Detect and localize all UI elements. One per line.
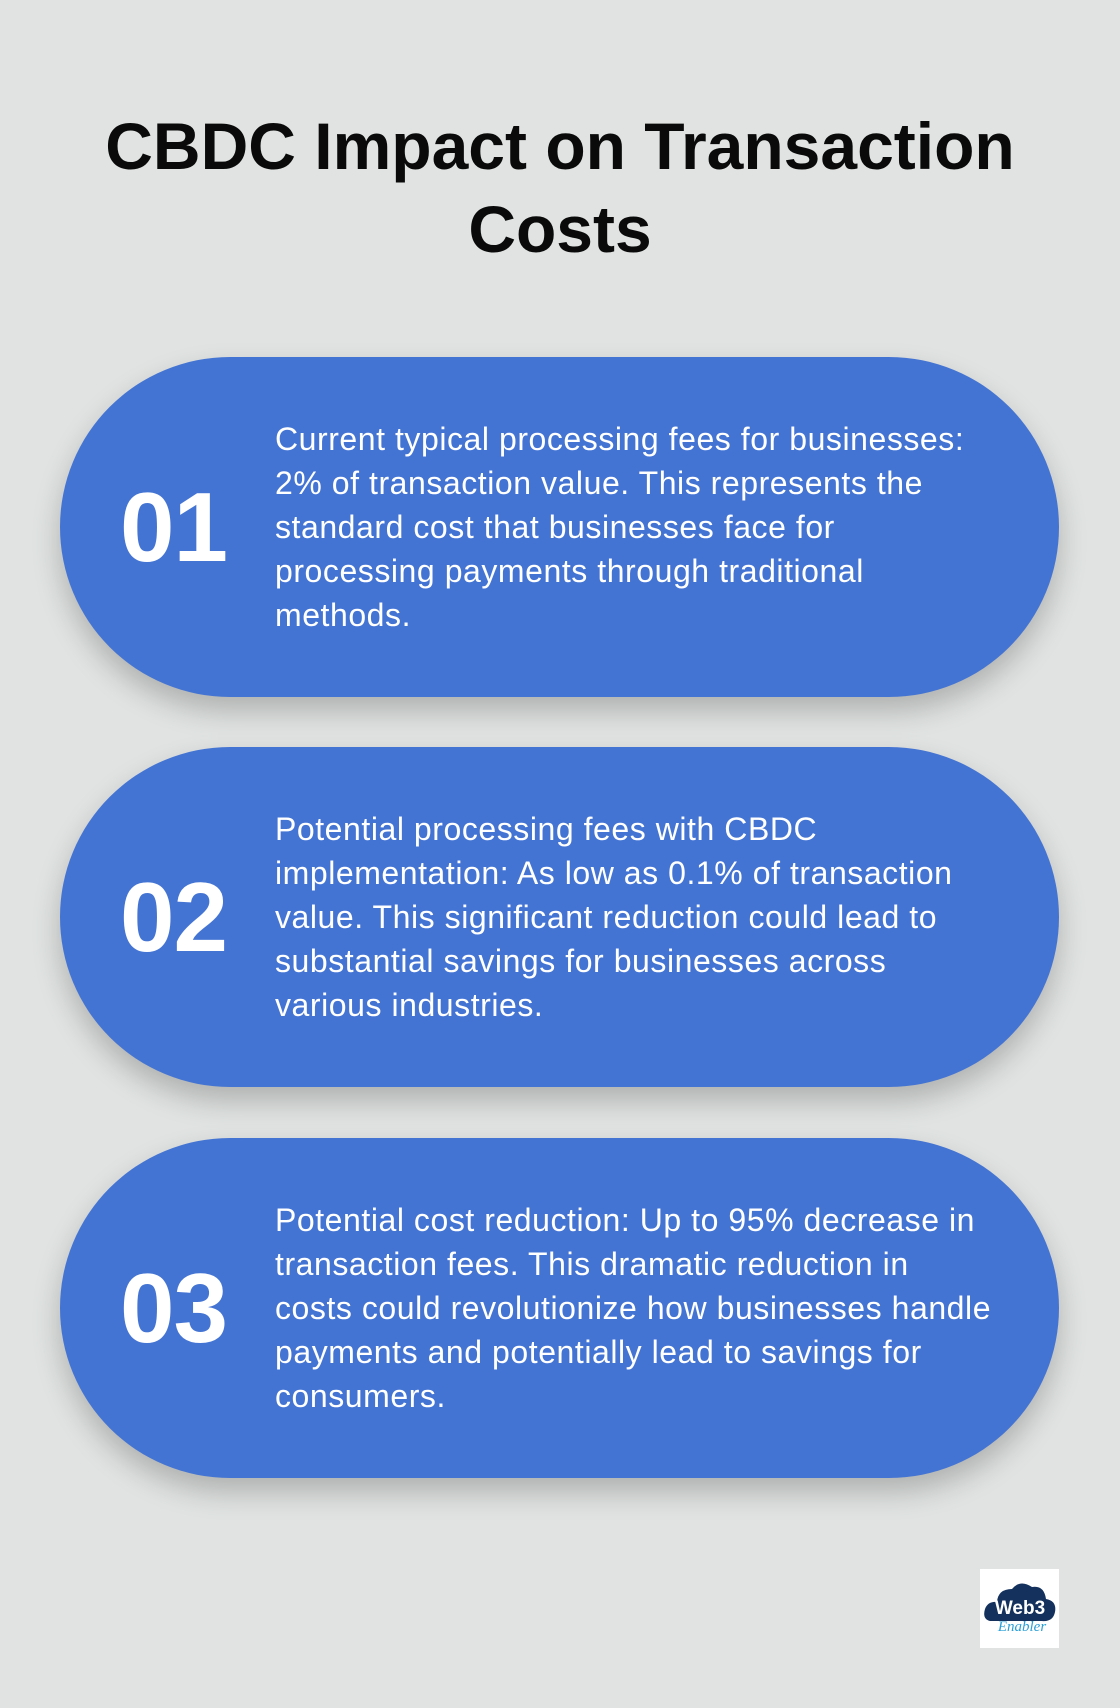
text block 02: implementation: As low as 0.1% of transaction (275, 855, 953, 891)
text block 03: consumers. (275, 1378, 446, 1414)
text block 01: 2% of transaction value. This represents the (275, 465, 923, 501)
icon: logo (980, 1569, 1059, 1648)
text block 02: substantial savings for businesses across (275, 943, 886, 979)
text block 03: payments and potentially lead to savings for (275, 1334, 922, 1370)
icon: logo: Web3 (995, 1598, 1045, 1619)
text block 01: methods. (275, 597, 411, 633)
text block 01: standard cost that businesses face for (275, 509, 835, 545)
text block 01: processing payments through traditional (275, 553, 864, 589)
text block 02: various industries. (275, 987, 543, 1023)
panel: card 02 (60, 747, 1059, 1087)
panel: card 03 (60, 1138, 1059, 1478)
title: CBDC Impact on Transaction (105, 109, 1015, 183)
text block 03: Potential cost reduction: Up to 95% decrease in (275, 1202, 975, 1238)
title: Costs (468, 192, 652, 266)
number 02: 02 (120, 862, 227, 972)
text block 01 (275, 421, 964, 633)
title (105, 109, 1015, 266)
icon: logo: Enabler (997, 1619, 1046, 1635)
text block 02: Potential processing fees with CBDC (275, 811, 817, 847)
text block 03 (275, 1202, 991, 1414)
number 01: 01 (120, 472, 227, 582)
text block 03: costs could revolutionize how businesses handle (275, 1290, 991, 1326)
panel: card 01 (60, 357, 1059, 697)
number 03: 03 (120, 1252, 227, 1362)
text block 03: transaction fees. This dramatic reduction in (275, 1246, 909, 1282)
text block 02 (275, 811, 953, 1023)
text block 02: value. This significant reduction could lead to (275, 899, 937, 935)
text block 01: Current typical processing fees for businesses: (275, 421, 964, 457)
